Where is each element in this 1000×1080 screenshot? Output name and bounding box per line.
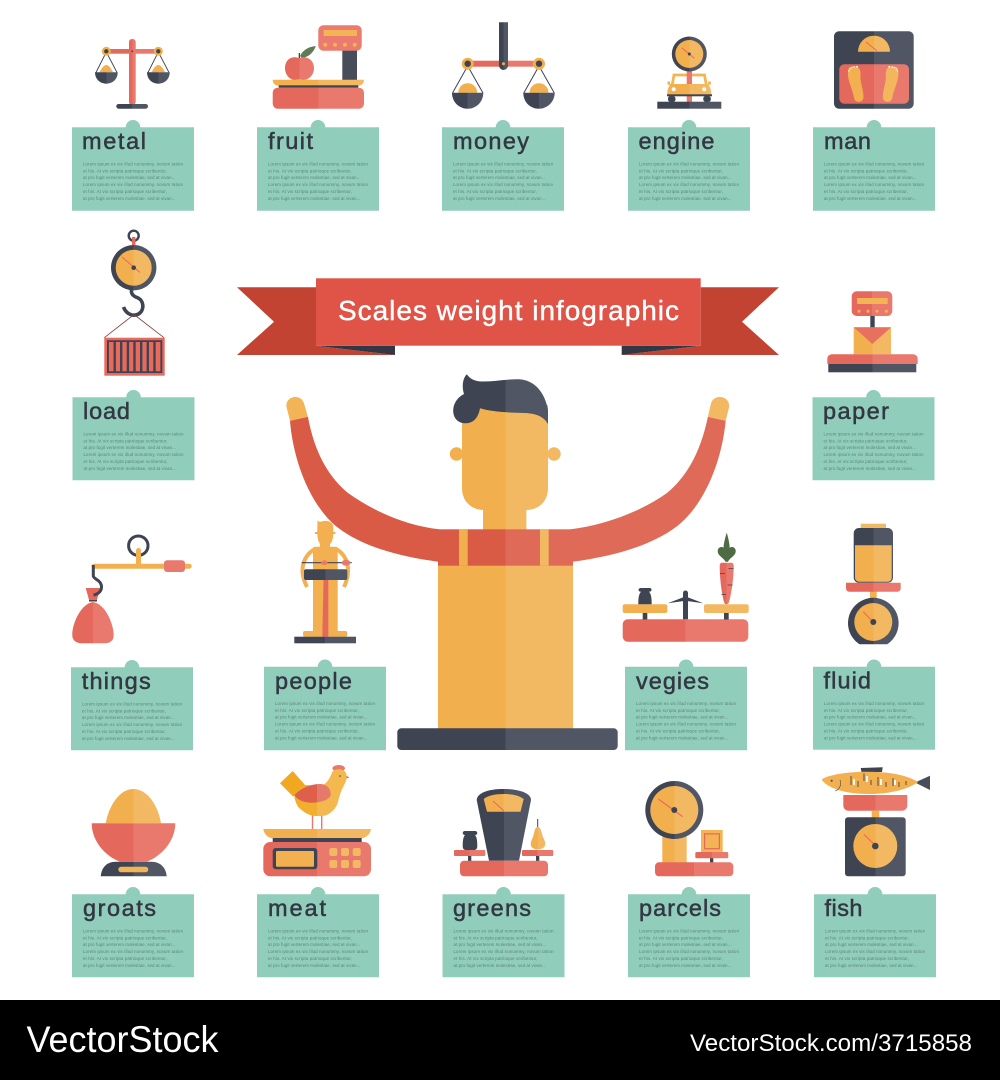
label card: parcels: Lorem ipsum ex vix illud nonummy, novum tation [639,928,740,934]
label card: man: et his. At vix scripta patrioque scribentur, [824,189,908,194]
label card: meat: Lorem ipsum ex vix illud nonummy, novum tation [268,928,369,934]
label card: metal: et his. At vix scripta patrioque scribentur, [83,168,167,173]
label card: fluid [813,660,935,750]
label card: people: at pro fugit verterem molestiae, sed at vivan... [275,715,368,720]
label card: things: et his. At vix scripta patrioque scribentur, [82,708,166,713]
panel: things [71,536,193,750]
banner right fold [622,346,701,355]
label card: parcels: et his. At vix scripta patrioque scribentur, [639,956,723,961]
icon: balance with carrot and weight [623,533,749,642]
icon: kitchen scale with fish [822,767,930,876]
label card: man: at pro fugit verterem molestiae, sed at vivan... [824,175,916,180]
label card: fruit: et his. At vix scripta patrioque scribentur, [268,189,352,194]
label card: groats: Lorem ipsum ex vix illud nonummy, novum tation [83,928,184,934]
label card: greens: Lorem ipsum ex vix illud nonummy, novum tation [454,928,554,934]
left hand [286,397,308,421]
label card: fruit: at pro fugit verterem molestiae, sed at vivan... [268,196,360,201]
label card: things: at pro fugit verterem molestiae, sed at vivan... [82,715,174,720]
label card: things: at pro fugit verterem molestiae, sed at vivan... [82,736,174,741]
label card: fish: at pro fugit verterem molestiae, sed at vivan... [825,963,918,968]
label card: parcels: parcels [639,895,721,921]
label card: things: et his. At vix scripta patrioque scribentur, [82,729,166,734]
label card: metal: metal [82,128,146,154]
label card: fruit: Lorem ipsum ex vix illud nonummy, novum tation [268,182,369,187]
label card: vegies: Lorem ipsum ex vix illud nonummy, novum tation [636,722,737,727]
label card: metal: Lorem ipsum ex vix illud nonummy, novum tation [83,182,184,187]
label card: engine [628,120,750,211]
label card: load: load [83,398,130,424]
label card: people: at pro fugit verterem molestiae, sed at vivan... [275,735,368,740]
label card: metal: Lorem ipsum ex vix illud nonummy, novum tation [83,162,184,166]
banner right tail [622,287,779,355]
panel: greens [442,789,564,977]
label card: things: things [82,668,151,694]
label card: engine: at pro fugit verterem molestiae, sed at vivan... [639,196,732,201]
label card: money: money [453,128,529,154]
label card: man: Lorem ipsum ex vix illud nonummy, novum tation [824,182,925,187]
label card: money: Lorem ipsum ex vix illud nonummy, novum tation [453,182,554,187]
panel: man [813,31,935,211]
label card: greens: Lorem ipsum ex vix illud nonummy, novum tation [454,949,554,954]
icon: jar on dial scale [846,524,901,644]
label card: load: et his. At vix scripta patrioque scribentur, [84,459,168,464]
label card: meat [257,887,379,977]
banner left fold [316,346,395,355]
label card: engine: et his. At vix scripta patrioque scribentur, [639,189,723,194]
label card: paper: at pro fugit verterem molestiae, sed at vivan... [824,466,916,471]
label card: people: et his. At vix scripta patrioque scribentur, [275,728,359,734]
label card: meat: et his. At vix scripta patrioque scribentur, [268,935,352,940]
label card: fluid: at pro fugit verterem molestiae, sed at vivan... [824,715,916,720]
label card: man [813,120,935,211]
icon: egg in bowl scale [92,789,175,876]
hair [453,374,548,424]
torso [438,565,573,729]
label card: vegies [625,660,747,750]
neck [483,500,526,530]
label card: fruit: at pro fugit verterem molestiae, sed at vivan... [268,175,360,180]
right ear [547,447,561,461]
label card: things: Lorem ipsum ex vix illud nonummy, novum tation [82,722,183,727]
label card: groats: at pro fugit verterem molestiae, sed at vivan... [83,942,176,947]
label card: load [72,390,194,480]
label card: groats: Lorem ipsum ex vix illud nonummy, novum tation [83,949,184,954]
label card: groats [72,887,194,977]
label card: engine: at pro fugit verterem molestiae, sed at vivan... [639,175,732,180]
base platform [397,728,618,750]
label card: man: at pro fugit verterem molestiae, sed at vivan... [824,196,916,201]
label card: parcels: at pro fugit verterem molestiae, sed at vivan... [639,942,732,947]
label card: people: people [275,668,352,694]
label card: man: et his. At vix scripta patrioque scribentur, [824,168,908,173]
right strap [540,529,549,566]
label card: greens: greens [453,895,531,921]
label card: fluid: Lorem ipsum ex vix illud nonummy, novum tation [824,722,925,727]
right hand [708,397,729,421]
label card: vegies: at pro fugit verterem molestiae, sed at vivan... [636,715,728,720]
panel: engine [628,36,750,211]
panel: fish [814,767,936,977]
label card: load: at pro fugit verterem molestiae, sed at vivan... [84,466,176,471]
label card: parcels: et his. At vix scripta patrioque scribentur, [639,935,723,940]
icon: balance scale [95,39,170,109]
label card: engine: Lorem ipsum ex vix illud nonummy, novum tation [639,182,740,187]
label card: groats: et his. At vix scripta patrioque scribentur, [83,935,167,940]
label card: meat: et his. At vix scripta patrioque scribentur, [268,956,352,961]
panel: fluid [813,524,935,750]
title: Scales weight infographic [338,295,679,326]
panel: metal [72,39,194,211]
panel: people [264,520,386,750]
label card: people [264,660,386,750]
label card: greens [442,887,564,977]
label card: engine: Lorem ipsum ex vix illud nonummy, novum tation [639,162,740,166]
label card: money [442,120,564,211]
panel: money [442,22,564,211]
label card: people: Lorem ipsum ex vix illud nonummy, novum tation [275,722,376,727]
label card: vegies: Lorem ipsum ex vix illud nonummy, novum tation [636,701,737,706]
label card: money: at pro fugit verterem molestiae, sed at vivan... [453,175,546,180]
icon: crane scale with container [104,231,165,376]
label card: load: Lorem ipsum ex vix illud nonummy, novum tation [84,452,184,457]
label card: greens: at pro fugit verterem molestiae, sed at vivan... [454,942,546,947]
label card: money: at pro fugit verterem molestiae, sed at vivan... [453,196,546,201]
label card: parcels [628,887,750,977]
label card: vegies: at pro fugit verterem molestiae, sed at vivan... [636,735,728,740]
label card: fruit: Lorem ipsum ex vix illud nonummy, novum tation [268,162,369,166]
label card: meat: Lorem ipsum ex vix illud nonummy, novum tation [268,949,369,954]
label card: fluid: et his. At vix scripta patrioque scribentur, [824,728,908,734]
label card: fish: Lorem ipsum ex vix illud nonummy, novum tation [825,949,926,954]
shirt chest [438,529,573,566]
face [462,405,548,510]
label card: people: et his. At vix scripta patrioque scribentur, [275,708,359,713]
label card: money: et his. At vix scripta patrioque scribentur, [453,168,537,173]
panel: load [72,231,194,480]
label card: money: Lorem ipsum ex vix illud nonummy, novum tation [453,162,554,166]
label card: things [71,660,193,750]
title banner [237,278,779,355]
label card: paper: Lorem ipsum ex vix illud nonummy, novum tation [824,432,924,436]
icon: bathroom scale [834,31,914,109]
banner left tail [237,287,395,355]
label card: greens: et his. At vix scripta patrioque scribentur, [454,956,538,961]
label card: meat: meat [268,895,326,921]
label card: paper: at pro fugit verterem molestiae, sed at vivan... [824,445,916,450]
panel: meat [257,765,379,977]
label card: man: man [824,128,871,154]
label card: groats: et his. At vix scripta patrioque scribentur, [83,956,167,961]
icon: dial scale with parcel [645,781,733,876]
label card: greens: at pro fugit verterem molestiae, sed at vivan... [454,963,546,968]
panel: paper [812,291,934,480]
label card: meat: at pro fugit verterem molestiae, sed at vivan... [268,942,360,947]
label card: fish: et his. At vix scripta patrioque scribentur, [825,956,909,961]
left ear [450,447,463,461]
label card: metal: et his. At vix scripta patrioque scribentur, [83,189,167,194]
panel: fruit [257,25,379,211]
label card: people: Lorem ipsum ex vix illud nonummy, novum tation [275,701,376,706]
label card: fluid: at pro fugit verterem molestiae, sed at vivan... [824,735,916,740]
label card: metal [72,120,194,211]
central man figure [286,374,729,750]
label card: paper [812,390,934,480]
panel: vegies [623,533,749,750]
label card: paper: et his. At vix scripta patrioque scribentur, [824,438,908,443]
panel: parcels [628,781,750,977]
label card: fish [814,887,936,977]
label card: load: et his. At vix scripta patrioque scribentur, [84,438,168,443]
label card: parcels: Lorem ipsum ex vix illud nonummy, novum tation [639,949,740,954]
label card: meat: at pro fugit verterem molestiae, sed at vivan... [268,963,360,968]
label card: things: Lorem ipsum ex vix illud nonummy, novum tation [82,702,183,706]
label card: vegies: vegies [636,668,709,694]
label card: metal: at pro fugit verterem molestiae, sed at vivan... [83,196,176,201]
label card: fluid: et his. At vix scripta patrioque scribentur, [824,708,908,713]
label card: load: Lorem ipsum ex vix illud nonummy, novum tation [84,432,184,436]
label card: fruit [257,120,379,211]
label card: metal: at pro fugit verterem molestiae, sed at vivan... [83,175,176,180]
icon: balance with pear and weight [454,789,553,876]
label card: fish: et his. At vix scripta patrioque scribentur, [825,935,909,940]
label card: fish: Lorem ipsum ex vix illud nonummy, novum tation [825,928,926,934]
label card: greens: et his. At vix scripta patrioque scribentur, [454,935,538,940]
label card: fruit: et his. At vix scripta patrioque scribentur, [268,168,352,173]
banner main band [316,278,701,346]
icon: postal scale with envelope [827,291,918,372]
label card: paper: et his. At vix scripta patrioque scribentur, [824,459,908,464]
label card: parcels: at pro fugit verterem molestiae, sed at vivan... [639,963,732,968]
icon: person on height scale [294,520,356,643]
label card: fish: at pro fugit verterem molestiae, sed at vivan... [825,942,918,947]
label card: fish: fish [824,895,862,921]
icon: steelyard with sack [72,536,192,643]
right arm [571,417,726,562]
label card: money: et his. At vix scripta patrioque scribentur, [453,189,537,194]
icon: hanging balance [452,22,555,109]
icon: vehicle scale [657,36,721,109]
label card: vegies: et his. At vix scripta patrioque scribentur, [636,728,720,734]
icon: shop scale with apple [273,25,364,109]
label card: engine: et his. At vix scripta patrioque scribentur, [639,168,723,173]
label card: groats: groats [83,895,156,921]
label card: engine: engine [638,128,714,154]
left strap [459,529,468,566]
label card: paper: paper [823,398,889,424]
label card: man: Lorem ipsum ex vix illud nonummy, novum tation [824,162,925,166]
label card: groats: at pro fugit verterem molestiae, sed at vivan... [83,963,176,968]
label card: vegies: et his. At vix scripta patrioque scribentur, [636,708,720,713]
label card: fluid: Lorem ipsum ex vix illud nonummy, novum tation [824,701,925,706]
footer image URL: VectorStock.com/3715858 [690,1030,972,1057]
label card: fruit: fruit [268,128,313,154]
icon: kitchen scale with chicken [263,765,371,876]
left arm [290,417,439,562]
footer brand: VectorStock [26,1018,219,1060]
footer bar [0,1000,1000,1080]
label card: fluid: fluid [824,668,871,694]
label card: load: at pro fugit verterem molestiae, sed at vivan... [84,445,176,450]
label card: paper: Lorem ipsum ex vix illud nonummy, novum tation [824,452,924,457]
panel: groats [72,789,194,977]
